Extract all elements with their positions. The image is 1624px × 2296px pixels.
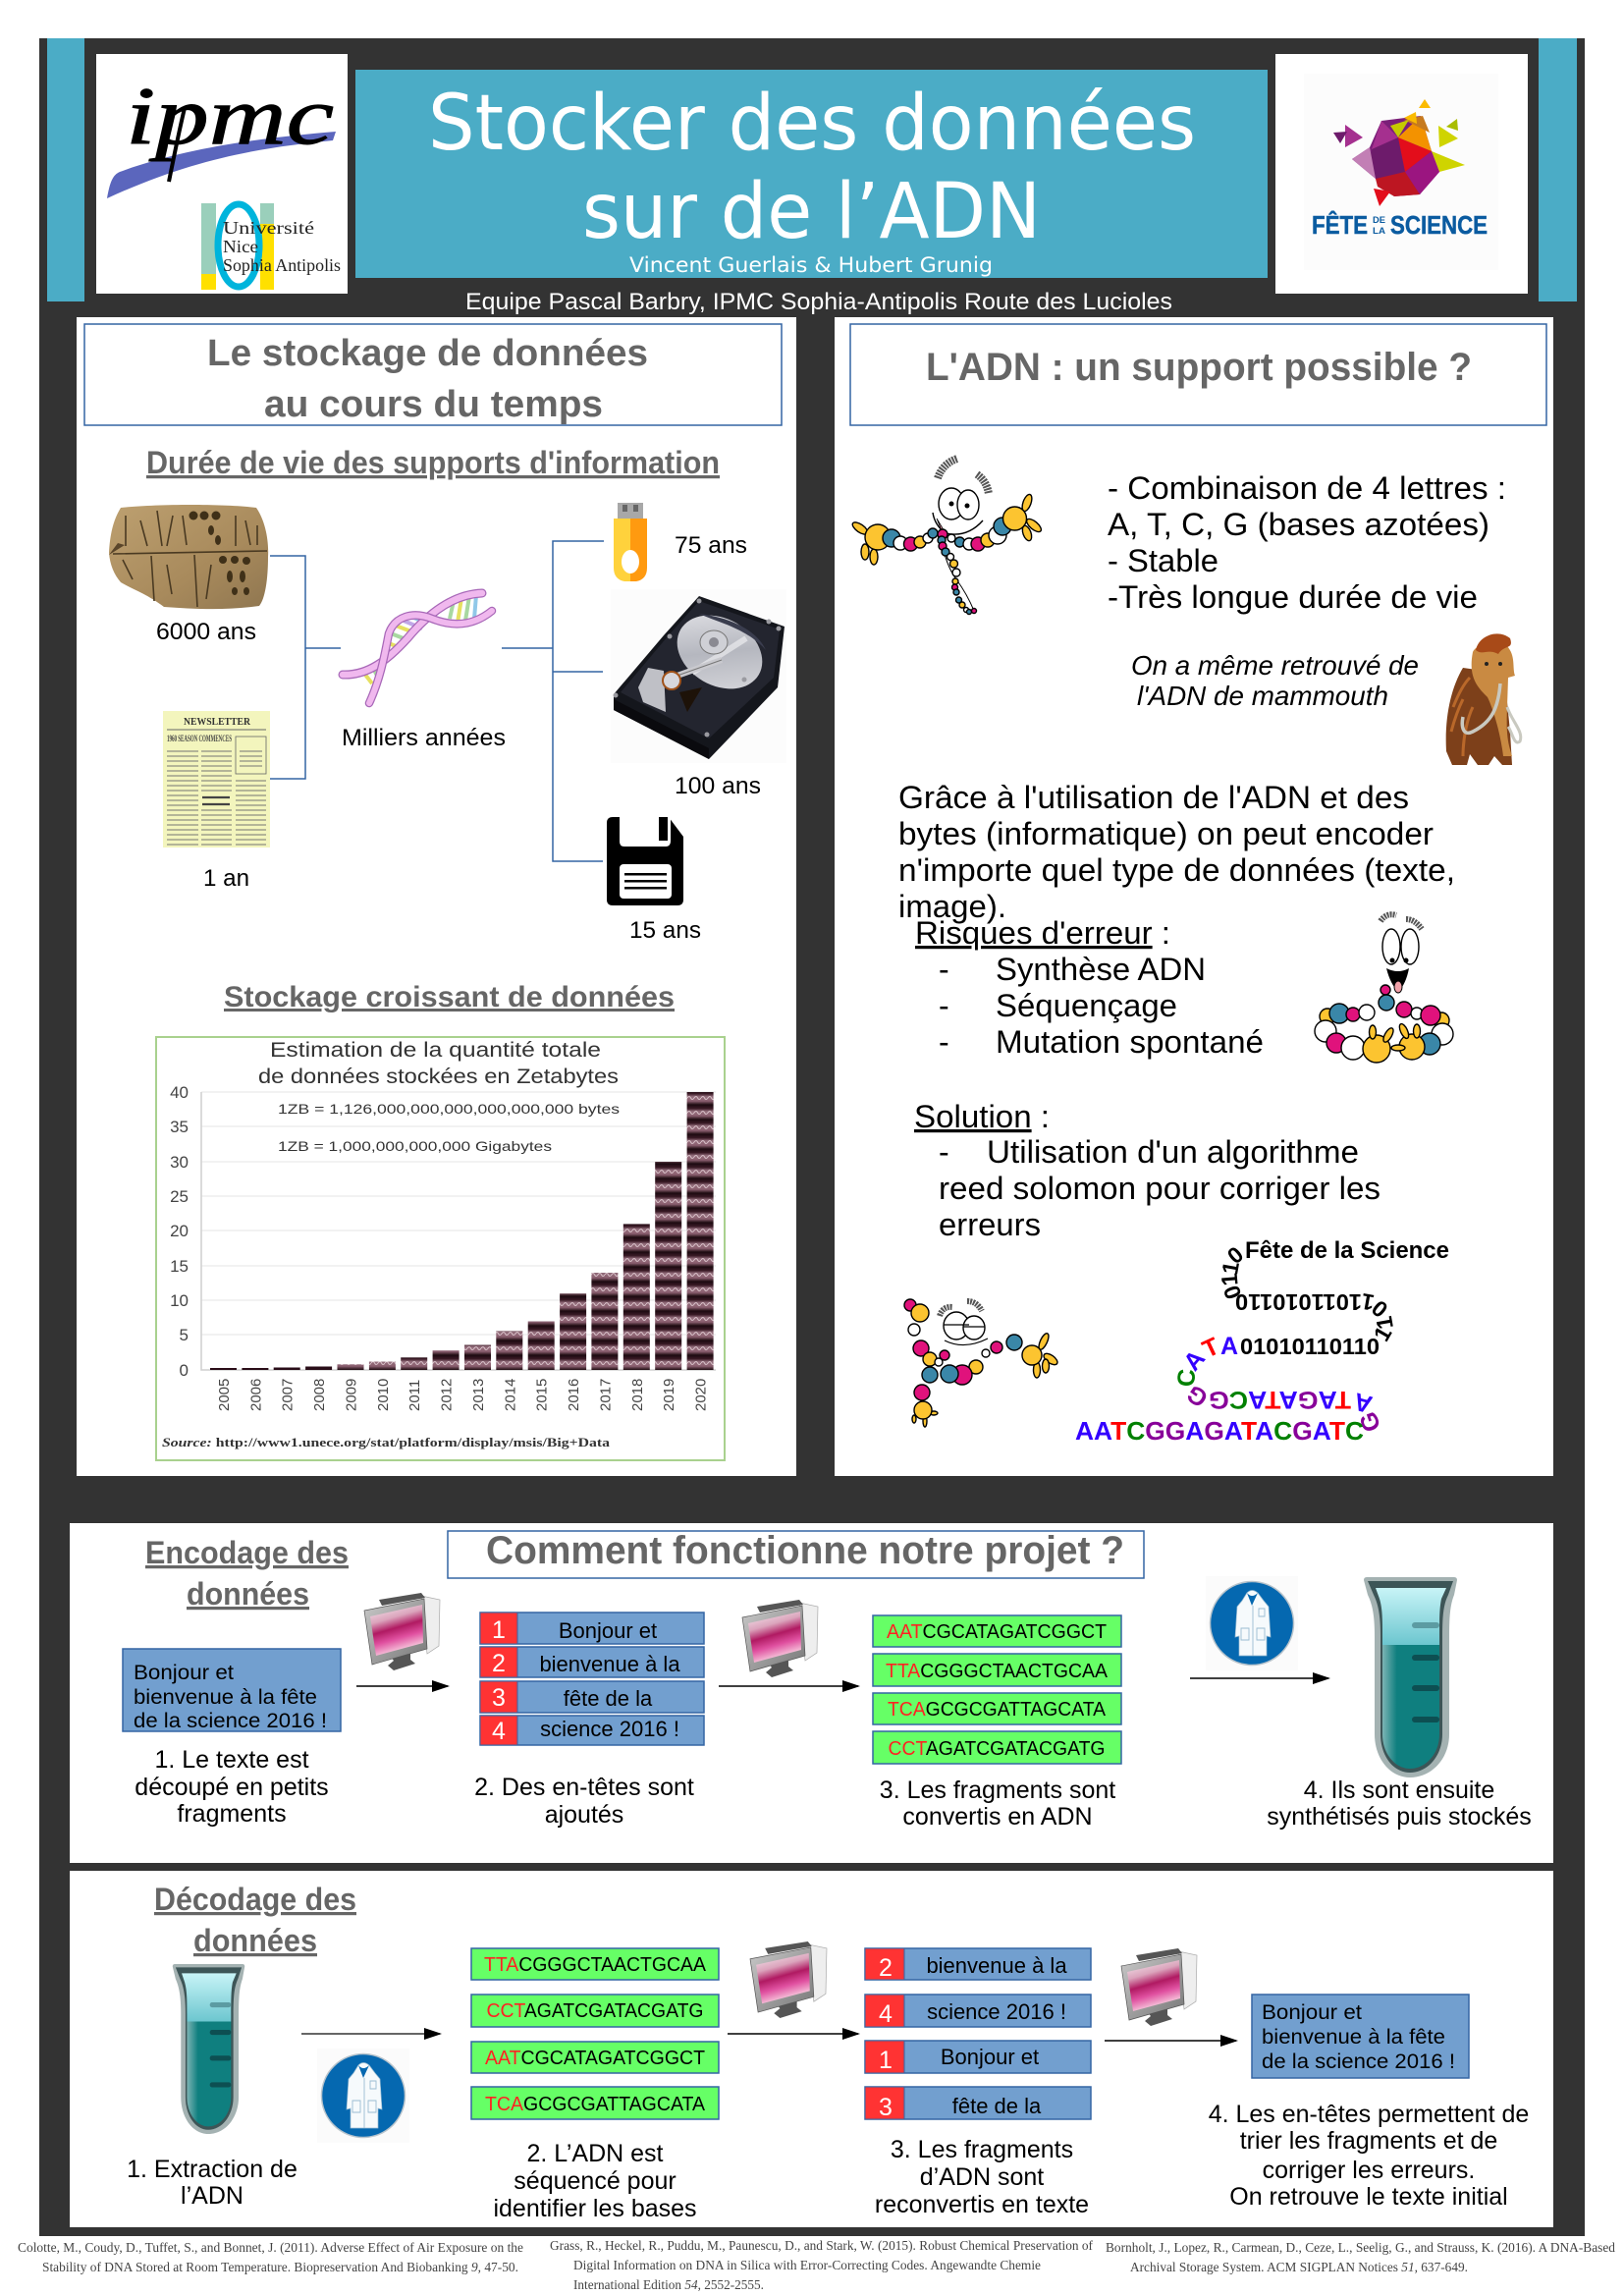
heading box: Le stockage de données <box>207 333 648 374</box>
y axis: 30 <box>170 1153 189 1172</box>
caption step 4: 4. Ils sont ensuite <box>1304 1777 1494 1804</box>
top curve digits: 0 <box>1218 1283 1246 1302</box>
year labels: 2014 <box>502 1379 518 1411</box>
right curve bases: G <box>1354 1408 1386 1436</box>
year labels: 2009 <box>344 1379 359 1411</box>
logo wordmark <box>1312 210 1488 240</box>
text: solution: Solution : <box>914 1099 1050 1134</box>
caption step 3: d’ADN sont <box>920 2163 1044 2191</box>
arrow <box>1190 1677 1328 1679</box>
top curve digits: 1 <box>1217 1272 1243 1287</box>
year labels: 2015 <box>534 1379 551 1411</box>
fragments with headers: 2 <box>492 1650 506 1677</box>
top curve digits: 1 <box>1217 1259 1244 1277</box>
icon: lab coat <box>1206 1576 1298 1670</box>
left curve bases: C <box>1172 1368 1201 1388</box>
year labels: 2020 <box>693 1379 710 1411</box>
heading box <box>850 324 1546 425</box>
right curve digits <box>1359 1288 1398 1345</box>
year labels: 2017 <box>597 1379 614 1411</box>
text: encoding explanation: n'importe quel type de données (texte, <box>898 852 1455 888</box>
icon: newspaper: NEWSLETTER <box>184 716 251 728</box>
heading box: au cours du temps <box>264 384 603 425</box>
text: error risks: Séquençage <box>996 988 1177 1023</box>
year labels: 2016 <box>566 1379 582 1411</box>
icon: DNA helix <box>343 593 492 703</box>
y axis <box>170 1083 189 1380</box>
logo: université: Nice <box>223 237 258 256</box>
text: mammoth note: On a même retrouvé de <box>1131 650 1419 681</box>
left curve bases: G <box>1181 1379 1213 1412</box>
label: 100 ans: 100 ans <box>675 773 761 799</box>
logo: université: Université <box>223 218 314 238</box>
year labels: 2012 <box>439 1379 456 1411</box>
caption step 3: 3. Les fragments sont <box>880 1777 1115 1804</box>
source text box: de la science 2016 ! <box>134 1710 327 1732</box>
heading: encoding: Encodage des <box>145 1535 349 1570</box>
y axis: 10 <box>170 1291 189 1310</box>
chart notes: 1ZB = 1,126,000,000,000,000,000,000 bytes <box>278 1101 620 1117</box>
caption step 2 <box>493 2140 697 2222</box>
main heading box: Comment fonctionne notre projet ? <box>486 1529 1124 1572</box>
fragments with headers: science 2016 ! <box>927 1999 1066 2024</box>
character: DNA mascot tongue out <box>1315 914 1453 1063</box>
logo wordmark: SCIENCE <box>1390 210 1488 240</box>
DNA sequences: TTACGGGCTAACTGCAA <box>886 1661 1109 1682</box>
fragments with headers: Bonjour et <box>559 1618 657 1643</box>
label: Milliers années: Milliers années <box>342 725 506 751</box>
left curve bases <box>1172 1333 1238 1412</box>
recovered text box <box>1252 1995 1469 2078</box>
subheading: growth: Stockage croissant de données <box>224 981 675 1013</box>
DNA sequences: TCAGCGCGATTAGCATA <box>485 2094 706 2115</box>
heading: encoding <box>145 1535 349 1612</box>
heading box: L'ADN : un support possible ? <box>926 346 1472 389</box>
caption step 4 <box>1209 2101 1529 2211</box>
fragments with headers: bienvenue à la <box>926 1953 1067 1978</box>
connector lines <box>270 541 604 861</box>
chart title: Estimation de la quantité totale <box>270 1039 601 1062</box>
icon: hard drive <box>611 589 786 763</box>
text: solution: reed solomon pour corriger les <box>939 1171 1380 1206</box>
panel: encoding <box>70 1523 1553 1863</box>
right curve bases <box>1351 1387 1386 1436</box>
left curve bases: A <box>1220 1333 1238 1360</box>
arrow <box>301 2033 440 2035</box>
y axis: 35 <box>170 1118 189 1136</box>
text: error risks: Risques d'erreur : <box>915 915 1170 951</box>
DNA sequences: TCAGCGCGATTAGCATA <box>888 1699 1107 1721</box>
title banner <box>355 70 1268 278</box>
y axis: 40 <box>170 1083 189 1102</box>
middle binary row: 01010110110 <box>1240 1334 1380 1359</box>
icon: USB key <box>614 503 647 581</box>
reference 1: Colotte, M., Coudy, D., Tuffet, S., and Bonnet, J. (2011). Adverse Effect of Air Exposure on the <box>18 2241 523 2256</box>
y axis: 20 <box>170 1222 189 1240</box>
text: DNA properties <box>1108 470 1506 615</box>
caption step 3: reconvertis en texte <box>875 2191 1089 2218</box>
year labels: 2018 <box>629 1379 646 1411</box>
year labels: 2019 <box>661 1379 677 1411</box>
heading: decoding: données <box>193 1923 317 1958</box>
year labels: 2008 <box>311 1379 328 1411</box>
right curve digits: 0 <box>1367 1295 1392 1323</box>
main title line 2: sur de l’ADN <box>582 168 1041 256</box>
icon: newspaper: 1960 SEASON COMMENCES <box>167 734 232 743</box>
year labels: 2006 <box>247 1379 264 1411</box>
right teal bar <box>1539 38 1577 301</box>
text: error risks: - <box>939 1024 949 1060</box>
icon: computer <box>750 1941 827 2018</box>
recovered text box: Bonjour et <box>1262 2001 1362 2024</box>
y axis: 25 <box>170 1187 189 1206</box>
reference 3: Archival Storage System. ACM SIGPLAN Notices 51, 637-649. <box>1130 2261 1468 2275</box>
top curve digits: 0 <box>1222 1241 1248 1269</box>
bar chart: stored data <box>156 1037 725 1460</box>
right curve bases: A <box>1351 1387 1376 1418</box>
DNA sequences <box>471 1948 719 2119</box>
top row: Fête de la Science: Fête de la Science <box>1245 1237 1449 1264</box>
year labels: 2010 <box>375 1379 392 1411</box>
icon: test tube <box>173 1964 244 2134</box>
text: DNA properties: - Stable <box>1108 543 1218 578</box>
icon: floppy disk <box>607 817 683 905</box>
fragments with headers: 3 <box>492 1684 506 1712</box>
caption step 2: identifier les bases <box>493 2195 697 2222</box>
fragments with headers: 2 <box>879 1954 893 1982</box>
label: 1 an: 1 an <box>203 865 249 892</box>
arrow <box>356 1685 448 1687</box>
caption step 1: 1. Le texte est <box>154 1746 309 1774</box>
fragments with headers: fête de la <box>564 1686 653 1711</box>
text: encoding explanation: Grâce à l'utilisation de l'ADN et des <box>898 780 1409 815</box>
reference 2 <box>550 2239 1093 2293</box>
text: mammoth note: l'ADN de mammouth <box>1137 681 1388 711</box>
character: DNA mascot sleeping <box>904 1299 1059 1427</box>
text: error risks: - <box>939 952 949 987</box>
icon: newspaper <box>163 711 270 847</box>
arrow <box>719 1685 858 1687</box>
text: DNA properties: -Très longue durée de vie <box>1108 579 1478 615</box>
caption step 3: convertis en ADN <box>902 1803 1093 1831</box>
heading: decoding: Décodage des <box>154 1882 356 1917</box>
character: DNA mascot waving <box>850 459 1043 615</box>
bars <box>210 1092 714 1370</box>
caption step 2: séquencé pour <box>514 2167 677 2195</box>
text: error risks: Synthèse ADN <box>996 952 1206 987</box>
logo wordmark: FÊTE <box>1312 210 1368 240</box>
caption step 3: 3. Les fragments <box>891 2136 1073 2163</box>
logo wordmark: DE <box>1373 215 1385 225</box>
text: encoding explanation: image). <box>898 889 1006 924</box>
icon: test tube <box>1364 1577 1457 1777</box>
logo wordmark: LA <box>1373 226 1386 236</box>
fragments with headers: 1 <box>879 2047 893 2074</box>
fragments with headers: 1 <box>492 1616 506 1644</box>
fragments with headers: 4 <box>879 2000 893 2028</box>
caption step 4: 4. Les en-têtes permettent de <box>1209 2101 1529 2128</box>
y axis: 5 <box>180 1326 189 1344</box>
icon: clay tablet <box>109 505 268 609</box>
label: 6000 ans: 6000 ans <box>156 619 256 645</box>
left curve bases: T <box>1198 1333 1223 1364</box>
reference 2: International Edition 54, 2552-2555. <box>573 2278 764 2293</box>
y axis: 15 <box>170 1257 189 1276</box>
fragments with headers <box>480 1613 704 1745</box>
fragments with headers: science 2016 ! <box>540 1717 679 1741</box>
reference 1 <box>18 2241 523 2275</box>
DNA sequences: AATCGCATAGATCGGCT <box>485 2048 705 2069</box>
text: encoding explanation <box>898 780 1455 924</box>
caption step 2: ajoutés <box>545 1801 623 1829</box>
logo: ipmc <box>107 71 336 198</box>
serpentine DNA and binary text <box>1075 1237 1449 1446</box>
right curve digits: 1 <box>1359 1288 1377 1316</box>
reference 3 <box>1106 2241 1615 2275</box>
caption step 2: 2. Des en-têtes sont <box>474 1774 694 1801</box>
caption step 3 <box>880 1777 1115 1831</box>
caption step 4: trier les fragments et de <box>1240 2127 1497 2155</box>
year labels: 2007 <box>280 1379 297 1411</box>
heading: decoding <box>154 1882 356 1958</box>
caption step 1 <box>135 1746 329 1828</box>
logo: université <box>201 203 341 290</box>
logo panel: Fête de la Science <box>1275 54 1528 294</box>
caption step 1: 1. Extraction de <box>127 2156 298 2183</box>
chart title: de données stockées en Zetabytes <box>258 1066 619 1088</box>
icon: lab coat <box>317 2049 409 2143</box>
icon: mammoth <box>1446 633 1521 765</box>
arrow <box>728 2033 858 2035</box>
heading: encoding: données <box>187 1576 309 1612</box>
authors: Vincent Guerlais & Hubert Grunig <box>629 253 993 277</box>
caption step 1: fragments <box>177 1800 287 1828</box>
recovered text box: de la science 2016 ! <box>1262 2050 1455 2073</box>
subheading: lifetime: Durée de vie des supports d'information <box>146 445 720 480</box>
bottom bases row: AATCGGAGATACGATC <box>1075 1416 1364 1446</box>
DNA sequences <box>873 1615 1121 1764</box>
text: solution: - <box>939 1134 949 1170</box>
label: 15 ans: 15 ans <box>629 917 701 944</box>
year labels <box>216 1379 710 1411</box>
heading box <box>84 324 782 425</box>
source text box: Bonjour et <box>134 1662 234 1684</box>
text: error risks: Mutation spontané <box>996 1024 1264 1060</box>
text: mammoth note <box>1131 650 1419 711</box>
reference 1: Stability of DNA Stored at Room Temperature. Biopreservation And Biobanking 9, 47-50. <box>42 2261 518 2275</box>
affiliation line: Equipe Pascal Barbry, IPMC Sophia-Antipolis Route des Lucioles <box>465 289 1172 315</box>
upside-down bases row: TAGATACG <box>1209 1386 1351 1413</box>
fragments with headers: fête de la <box>952 2094 1042 2118</box>
text: error risks <box>915 915 1264 1060</box>
reference 3: Bornholt, J., Lopez, R., Carmean, D., Ceze, L., Seelig, G., and Strauss, K. (2016). A DNA-Based <box>1106 2241 1615 2256</box>
caption step 1: l’ADN <box>181 2182 244 2210</box>
source text box <box>123 1649 341 1732</box>
upper binary row: 1011010110 <box>1235 1289 1362 1315</box>
label: 75 ans: 75 ans <box>675 532 747 559</box>
recovered text box: bienvenue à la fête <box>1262 2026 1445 2049</box>
caption step 4: On retrouve le texte initial <box>1229 2183 1508 2211</box>
logo: ipmc: ipmc <box>126 71 334 162</box>
y axis: 0 <box>180 1361 189 1380</box>
DNA sequences: CCTAGATCGATACGATG <box>888 1738 1106 1760</box>
year labels: 2011 <box>406 1380 423 1411</box>
right curve digits: 1 <box>1371 1314 1398 1332</box>
year labels: 2013 <box>470 1379 487 1411</box>
caption step 4: corriger les erreurs. <box>1263 2157 1475 2184</box>
DNA sequences: TTACGGGCTAACTGCAA <box>484 1954 707 1976</box>
chart notes <box>278 1101 620 1154</box>
year labels: 2005 <box>216 1379 233 1411</box>
panel: decoding <box>70 1871 1553 2227</box>
text: solution: erreurs <box>939 1207 1041 1242</box>
caption step 1: découpé en petits <box>135 1774 329 1801</box>
fragments with headers <box>865 1948 1091 2121</box>
text: DNA properties: A, T, C, G (bases azotées) <box>1108 507 1489 542</box>
fragments with headers: 4 <box>492 1718 506 1745</box>
reference 2: Grass, R., Heckel, R., Puddu, M., Paunescu, D., and Stark, W. (2015). Robust Chemical Preservation of <box>550 2239 1093 2254</box>
panel: DNA as a support <box>835 317 1553 1476</box>
logo panel: IPMC and Université Nice Sophia Antipolis <box>96 54 348 294</box>
fragments with headers: 3 <box>879 2094 893 2121</box>
DNA sequences: AATCGCATAGATCGGCT <box>887 1621 1107 1643</box>
text: error risks: - <box>939 988 949 1023</box>
left teal bar <box>47 38 84 301</box>
arrow <box>1105 2040 1236 2042</box>
caption step 2: 2. L’ADN est <box>527 2140 664 2167</box>
left curve bases: A <box>1178 1345 1211 1376</box>
caption step 1 <box>127 2156 298 2210</box>
main title: Stocker des données <box>428 80 1196 168</box>
top curve digits <box>1217 1241 1248 1302</box>
text: DNA properties: - Combinaison de 4 lettres : <box>1108 470 1506 506</box>
chart title <box>258 1039 619 1088</box>
source text box: bienvenue à la fête <box>134 1686 317 1709</box>
fragments with headers: bienvenue à la <box>539 1652 680 1676</box>
text: encoding explanation: bytes (informatique) on peut encoder <box>898 816 1434 851</box>
DNA sequences: CCTAGATCGATACGATG <box>487 2000 703 2022</box>
text: solution: Utilisation d'un algorithme <box>987 1134 1359 1170</box>
caption step 3 <box>875 2136 1089 2218</box>
text: solution <box>914 1099 1380 1242</box>
icon: computer <box>364 1593 440 1670</box>
chart notes: 1ZB = 1,000,000,000,000 Gigabytes <box>278 1138 552 1154</box>
caption step 4 <box>1267 1777 1532 1831</box>
fragments with headers: Bonjour et <box>941 2045 1039 2069</box>
caption step 2 <box>474 1774 694 1829</box>
chart source: Source: http://www1.unece.org/stat/platform/display/msis/Big+Data <box>162 1435 611 1449</box>
caption step 4: synthétisés puis stockés <box>1267 1803 1532 1831</box>
panel: storage over time <box>77 317 796 1476</box>
reference 2: Digital Information on DNA in Silica with Error-Correcting Codes. Angewandte Chemie <box>573 2259 1041 2273</box>
logo: université: Sophia Antipolis <box>223 255 341 275</box>
icon: computer <box>1121 1948 1197 2026</box>
right curve digits: 1 <box>1369 1322 1397 1345</box>
icon: computer <box>742 1600 818 1677</box>
